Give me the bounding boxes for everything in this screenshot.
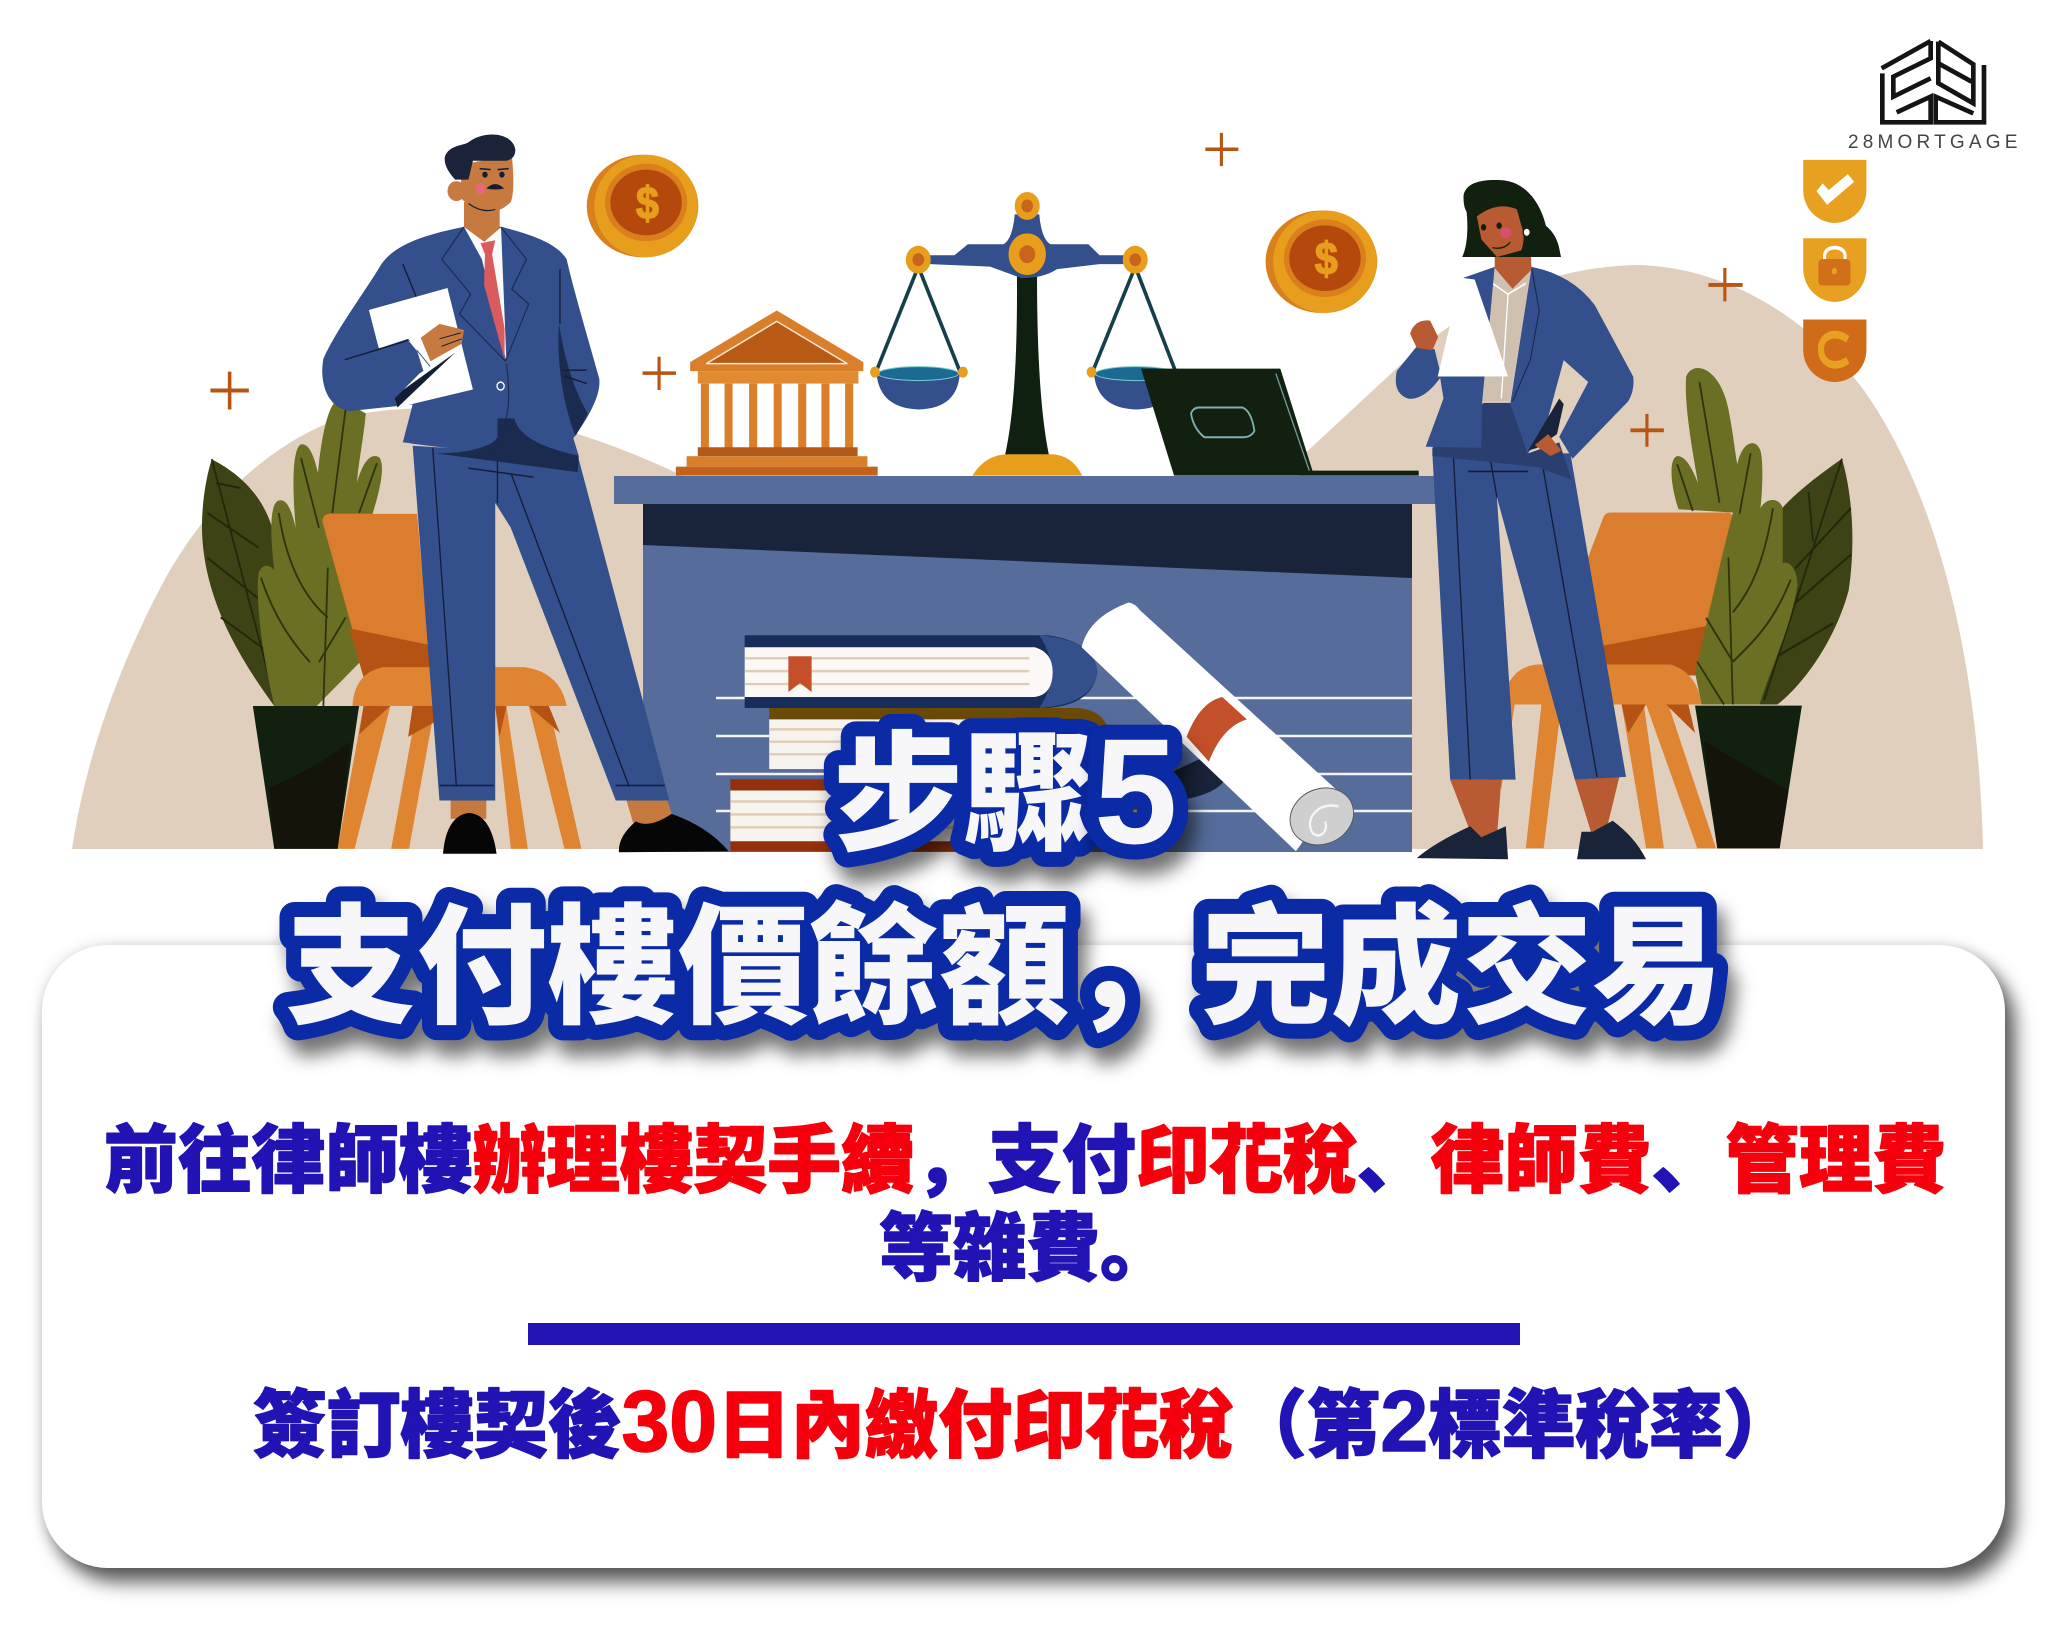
jacket bbox=[322, 227, 599, 456]
man and coin bbox=[210, 135, 729, 854]
plus signs right bbox=[1630, 268, 1743, 447]
earring bbox=[1523, 228, 1530, 237]
logo wordmark: 28MORTGAGE bbox=[1848, 132, 2022, 153]
neck woman bbox=[1495, 245, 1532, 289]
desk body bbox=[643, 500, 1412, 852]
woman figure bbox=[1396, 180, 1646, 859]
desk dark band bbox=[643, 503, 1412, 578]
shield lock bbox=[1803, 238, 1866, 302]
shoes woman bbox=[1417, 821, 1646, 859]
hand bbox=[421, 324, 464, 361]
face details bbox=[476, 183, 485, 194]
lapels bbox=[442, 227, 529, 448]
pot right bbox=[1695, 706, 1802, 848]
chair back bbox=[322, 514, 431, 670]
hair woman bbox=[1462, 180, 1561, 257]
balance scale bbox=[870, 192, 1177, 476]
document bbox=[369, 288, 473, 407]
coin right: $ bbox=[1315, 234, 1338, 285]
heading number: 5 bbox=[1094, 707, 1177, 875]
items on desk bbox=[676, 133, 1419, 853]
paper woman bbox=[1438, 278, 1508, 377]
dark waist bbox=[435, 418, 579, 472]
woman, shields, logo bbox=[1396, 160, 1866, 859]
main title: 支付樓價餘額，完成交易 bbox=[286, 895, 1723, 1041]
plus left bbox=[210, 372, 249, 409]
shirt bbox=[464, 227, 506, 361]
chair back right bbox=[1586, 513, 1732, 675]
green leaves bbox=[258, 398, 382, 706]
logo mark bbox=[1882, 41, 1984, 122]
sleeve over document bbox=[323, 339, 431, 411]
green leaves right bbox=[1671, 368, 1797, 705]
man figure bbox=[322, 135, 729, 854]
coin right bbox=[1266, 210, 1377, 313]
hand at hip bbox=[1535, 434, 1561, 456]
waist woman bbox=[1432, 403, 1572, 480]
tie bbox=[481, 240, 505, 360]
heading chinese: 步驟 bbox=[833, 722, 1093, 868]
chair seat bbox=[352, 667, 567, 706]
dark leaf bbox=[202, 459, 294, 706]
left plant and chair bbox=[202, 398, 581, 849]
lower legs bbox=[1450, 777, 1619, 837]
plus top bbox=[1205, 133, 1238, 166]
trousers woman bbox=[1432, 453, 1626, 780]
white rounded card bbox=[42, 945, 2005, 1568]
step heading bbox=[833, 707, 1177, 875]
coin left bbox=[587, 155, 698, 257]
ankles bbox=[451, 799, 672, 832]
face woman bbox=[1477, 206, 1524, 257]
shield C bbox=[1803, 319, 1866, 382]
diploma scroll bbox=[1082, 602, 1359, 853]
shield check bbox=[1803, 160, 1866, 223]
body text line 2: 等雜費。 bbox=[879, 1207, 1174, 1290]
logo: 28MORTGAGE bbox=[1848, 41, 2022, 153]
hand woman bbox=[1410, 320, 1438, 350]
trousers bbox=[413, 446, 669, 800]
body text line 3: 簽訂樓契後30日內繳付印花稅（第2標準稅率） bbox=[253, 1374, 1797, 1470]
shoes bbox=[443, 813, 729, 854]
neck bbox=[464, 202, 500, 242]
head bbox=[460, 155, 513, 212]
illustration: law office scene bbox=[72, 41, 2022, 859]
hair bbox=[445, 135, 515, 180]
temple bbox=[676, 310, 878, 476]
body text line 1: 前往律師樓辦理樓契手續，支付印花稅、律師費、管理費 bbox=[104, 1119, 1946, 1202]
shirt woman bbox=[1481, 267, 1532, 401]
dark leaf right bbox=[1757, 459, 1852, 705]
coin left: $ bbox=[636, 178, 659, 229]
pot bbox=[253, 706, 359, 849]
beige hill right bbox=[1300, 265, 1983, 849]
beige hill left bbox=[72, 408, 700, 849]
right plant and chair bbox=[1488, 368, 1852, 848]
sleeve woman bbox=[1396, 346, 1441, 399]
divider bar bbox=[528, 1323, 1520, 1345]
jacket woman bbox=[1426, 267, 1495, 448]
chair legs right bbox=[1488, 705, 1716, 848]
laptop bbox=[1141, 369, 1419, 476]
desk top bbox=[614, 476, 1444, 504]
book stack bbox=[730, 635, 1108, 851]
desk bbox=[614, 476, 1444, 852]
button bbox=[497, 382, 504, 390]
chair seat right bbox=[1501, 664, 1702, 705]
plus near temple bbox=[643, 357, 676, 390]
chair legs bbox=[338, 706, 581, 849]
